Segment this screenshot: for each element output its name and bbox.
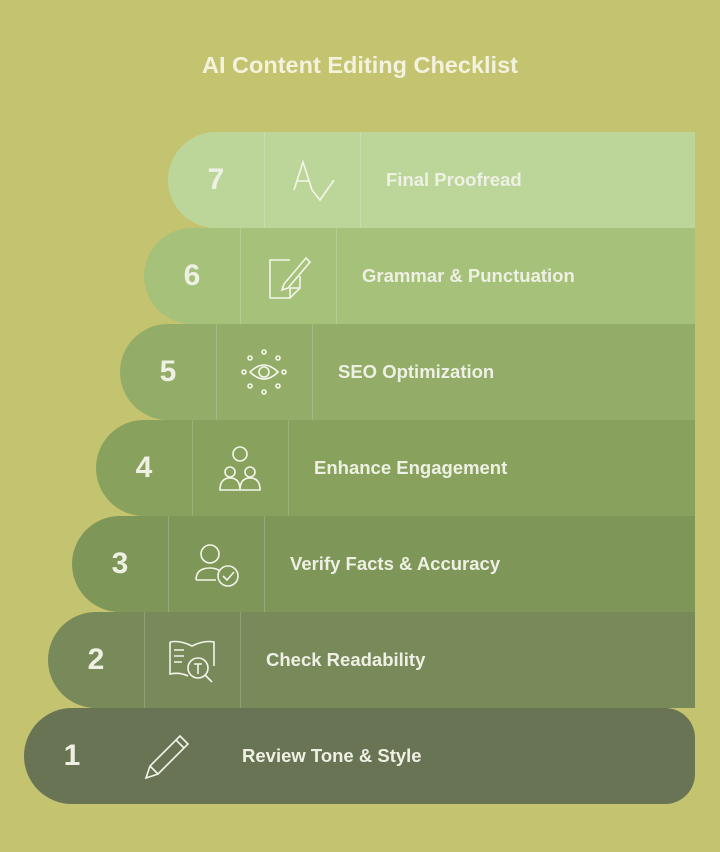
- step 6: 6: [184, 259, 200, 292]
- step 7: Final Proofread: [386, 169, 522, 190]
- step 3: Verify Facts & Accuracy: [290, 553, 500, 574]
- step 5: [120, 324, 695, 420]
- step 3: [72, 516, 695, 612]
- step 1: Review Tone & Style: [242, 745, 422, 766]
- title: AI Content Editing Checklist: [202, 52, 518, 78]
- step 7: [168, 132, 695, 228]
- step 2: Check Readability: [266, 649, 425, 670]
- icon: person check: [195, 544, 239, 587]
- step 1: 1: [64, 739, 80, 772]
- icon: spell check: [293, 160, 334, 202]
- step 2: [48, 612, 695, 708]
- icon: note with pen: [269, 257, 311, 299]
- step 5: SEO Optimization: [338, 361, 494, 382]
- icon: eye network: [241, 349, 287, 395]
- step 1: [24, 708, 695, 804]
- icon: people with cycle: [219, 446, 261, 491]
- icon: book with magnifier: [169, 640, 215, 682]
- step 3: 3: [112, 547, 128, 580]
- step 5: 5: [160, 355, 176, 388]
- step 6: [144, 228, 695, 324]
- step 2: 2: [88, 643, 104, 676]
- step 6: Grammar & Punctuation: [362, 265, 575, 286]
- icon: pencil: [144, 735, 189, 780]
- step 4: Enhance Engagement: [314, 457, 507, 478]
- step 4: [96, 420, 695, 516]
- step 4: 4: [136, 451, 152, 484]
- step 7: 7: [208, 163, 224, 196]
